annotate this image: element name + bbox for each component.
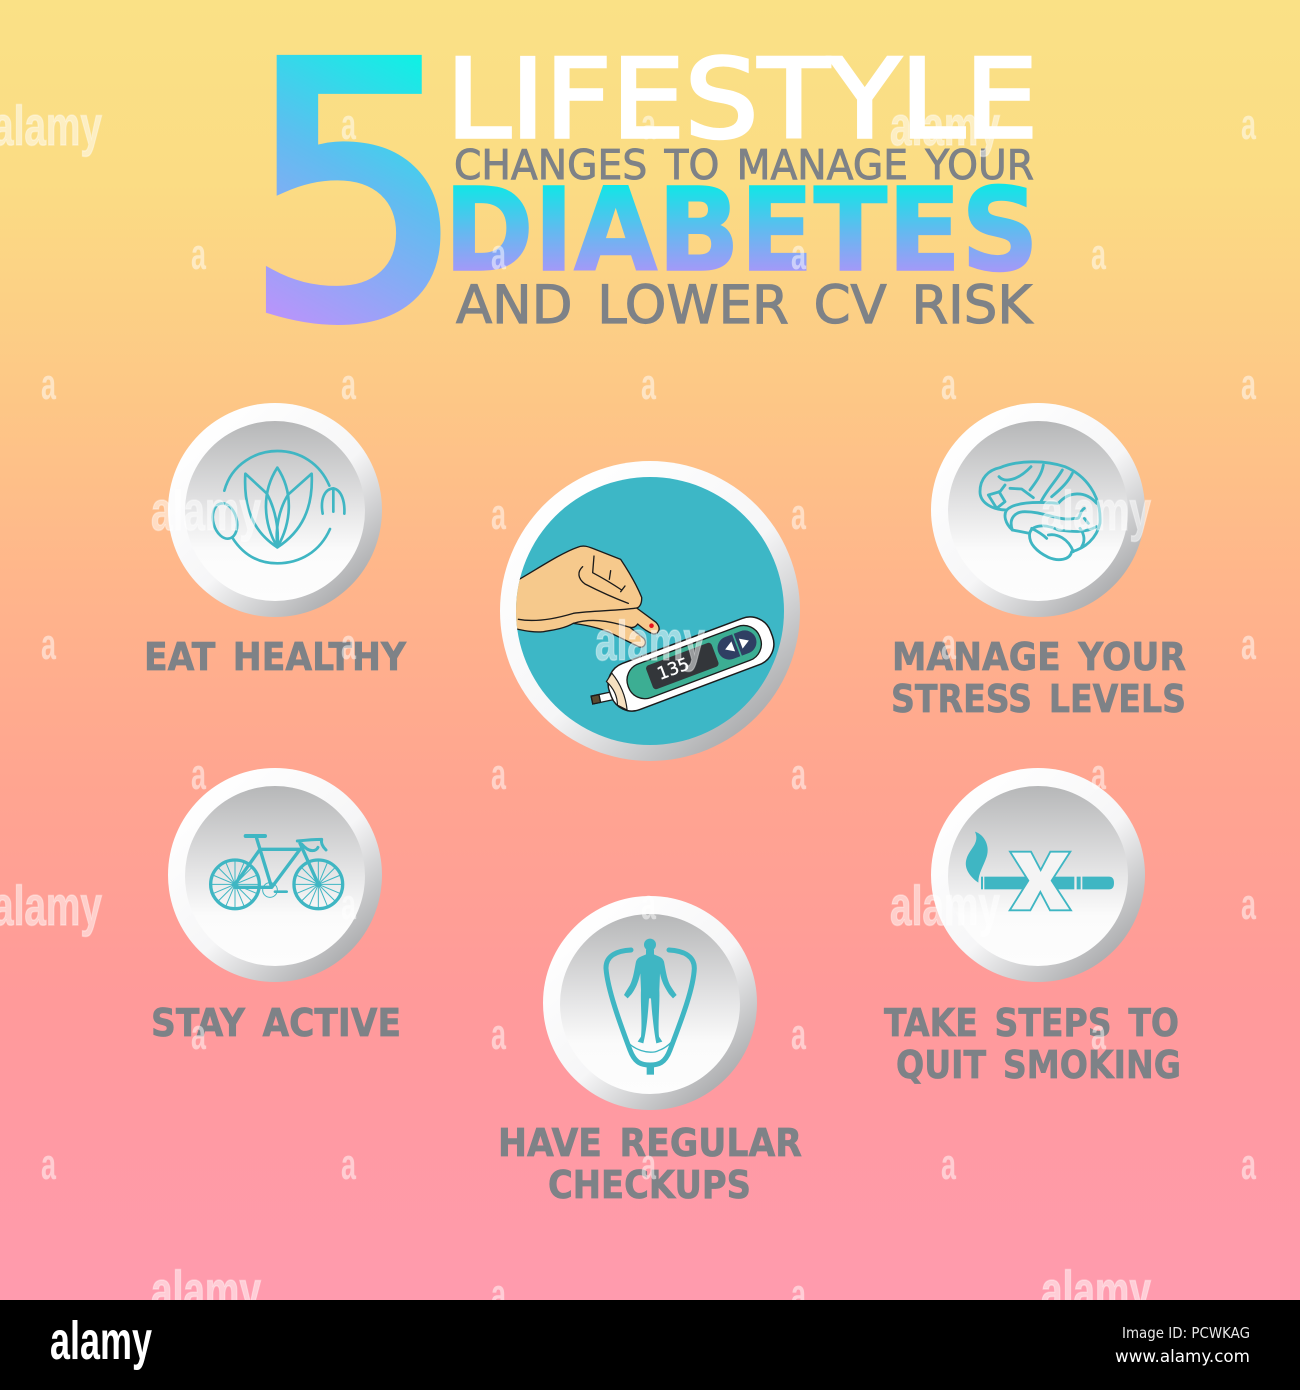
hand xyxy=(513,546,659,647)
title line: changes to manage your: CHANGES TO MANAGE YOUR xyxy=(454,141,1034,189)
watermark pattern: a xyxy=(491,490,506,539)
label: stay active: STAY ACTIVE xyxy=(151,1001,401,1045)
watermark pattern: a xyxy=(191,1010,206,1059)
watermark pattern: a xyxy=(341,1140,356,1189)
meter body xyxy=(602,611,780,717)
watermark pattern: a xyxy=(191,750,206,799)
icon: leaves with stethoscope and spoon xyxy=(209,451,344,563)
label: have regular checkups: CHECKUPS xyxy=(548,1163,751,1207)
watermark pattern: a xyxy=(1241,100,1256,149)
watermark pattern: a xyxy=(491,1010,506,1059)
panel: manage stress xyxy=(931,403,1145,617)
watermark pattern: a xyxy=(341,620,356,669)
watermark pattern: a xyxy=(941,1140,956,1189)
watermark pattern: a xyxy=(41,360,56,409)
watermark pattern: a xyxy=(791,1010,806,1059)
test strip xyxy=(591,691,619,704)
watermark pattern: a xyxy=(941,360,956,409)
footer bar xyxy=(0,1300,1300,1390)
watermark pattern: a xyxy=(791,490,806,539)
watermark pattern: a xyxy=(41,620,56,669)
watermark pattern: a xyxy=(341,360,356,409)
meter buttons xyxy=(714,627,760,663)
panel: eat healthy xyxy=(168,403,382,617)
title line: diabetes: DIABETES xyxy=(444,164,1039,298)
label: eat healthy: EAT HEALTHY xyxy=(144,635,406,679)
label: manage your stress levels: STRESS LEVELS xyxy=(891,677,1186,721)
label: have regular checkups xyxy=(498,1121,802,1207)
footer logo: alamy xyxy=(50,1311,152,1371)
label: manage your stress levels xyxy=(891,635,1186,721)
watermark pattern: a xyxy=(1241,1140,1256,1189)
label: take steps to quit smoking: QUIT SMOKING xyxy=(896,1043,1181,1087)
watermark pattern: a xyxy=(491,750,506,799)
meter display xyxy=(645,642,720,690)
watermark pattern: a xyxy=(1091,230,1106,279)
title line: lifestyle: LIFESTYLE xyxy=(446,36,1038,163)
watermark pattern: alamy xyxy=(1041,479,1151,542)
watermark pattern: a xyxy=(491,1270,506,1319)
label: take steps to quit smoking: TAKE STEPS TO xyxy=(884,1001,1179,1045)
watermark pattern: a xyxy=(1241,880,1256,929)
panel: regular checkups xyxy=(543,896,757,1110)
watermark pattern: alamy xyxy=(151,479,261,542)
watermark pattern: a xyxy=(791,750,806,799)
title xyxy=(244,0,1039,398)
label: have regular checkups: HAVE REGULAR xyxy=(498,1121,802,1165)
label: take steps to quit smoking xyxy=(884,1001,1181,1087)
watermark pattern: a xyxy=(941,620,956,669)
icon: cigarette with cross xyxy=(966,832,1114,910)
watermark pattern: a xyxy=(1241,360,1256,409)
red blood drop xyxy=(649,623,654,628)
watermark pattern: a xyxy=(791,1270,806,1319)
watermark pattern: alamy xyxy=(890,94,1000,157)
watermark pattern: a xyxy=(1091,1010,1106,1059)
watermark pattern: alamy xyxy=(151,1259,261,1322)
watermark pattern: a xyxy=(341,100,356,149)
icon: bicycle xyxy=(211,836,343,909)
panel: quit smoking xyxy=(931,768,1145,982)
central panel: glucose meter xyxy=(500,461,800,761)
watermark pattern: a xyxy=(641,100,656,149)
watermark pattern: alamy xyxy=(1041,1259,1151,1322)
glucose meter device xyxy=(591,611,780,717)
website: www.alamy.com xyxy=(1115,1347,1250,1367)
watermark pattern: a xyxy=(641,1140,656,1189)
watermark pattern: a xyxy=(791,230,806,279)
watermark pattern: a xyxy=(641,360,656,409)
icon: brain xyxy=(980,462,1100,560)
panel: stay active xyxy=(168,768,382,982)
watermark pattern: a xyxy=(1241,620,1256,669)
label: manage your stress levels: MANAGE YOUR xyxy=(892,635,1186,679)
title numeral 5: 5 xyxy=(244,0,466,398)
watermark pattern: a xyxy=(191,230,206,279)
watermark pattern: alamy xyxy=(890,874,1000,937)
meter reading: 135 xyxy=(655,654,692,685)
watermark pattern: a xyxy=(341,880,356,929)
watermark pattern: a xyxy=(41,1140,56,1189)
watermark pattern: alamy xyxy=(595,609,705,672)
watermark pattern: a xyxy=(491,230,506,279)
watermark pattern: a xyxy=(1091,750,1106,799)
icon: person with stethoscope xyxy=(606,939,694,1075)
title line: and lower cv risk: AND LOWER CV RISK xyxy=(456,275,1033,336)
watermark pattern: a xyxy=(641,880,656,929)
image id: Image ID: PCWKAG xyxy=(1122,1324,1250,1342)
